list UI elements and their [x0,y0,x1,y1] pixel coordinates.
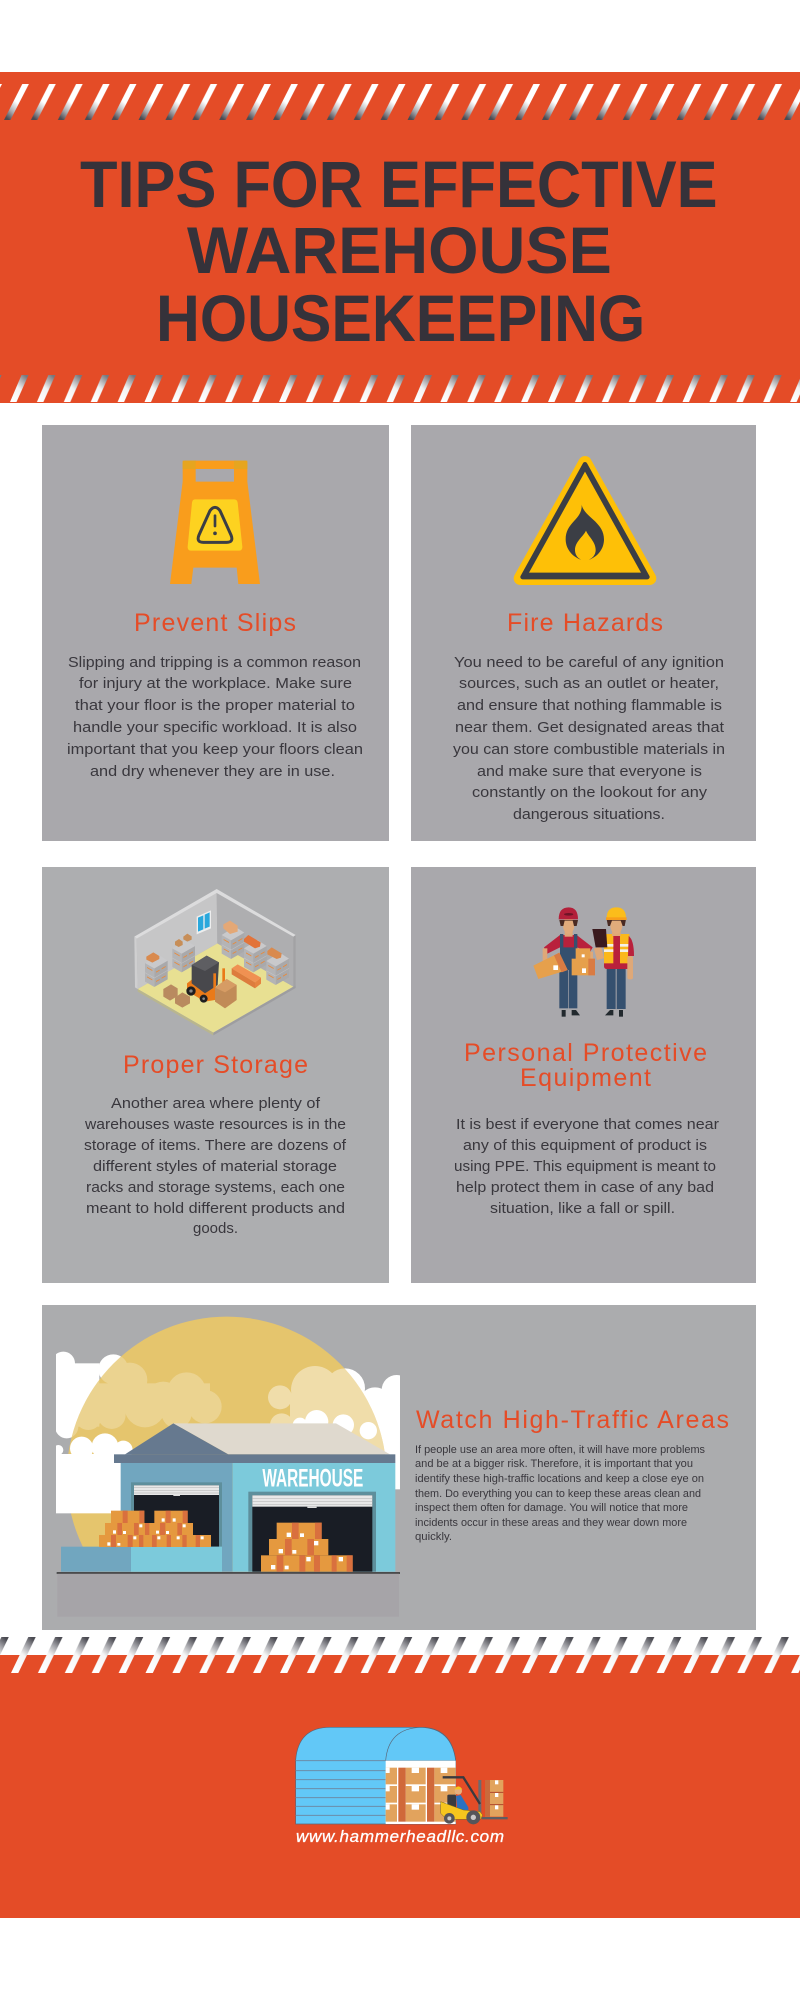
text: ppe body: using PPE. This equipment is meant to [454,1158,716,1175]
icon: wet floor sign [170,461,260,584]
text: prevent slips body: for injury at the workplace. Make sure [79,675,352,692]
right box pile [261,1523,353,1572]
text: high-traffic body: them. Do everything you can to keep these areas clean and [415,1488,701,1500]
text: fire hazards body: You need to be careful of any ignition [454,654,724,671]
title: TIPS FOR EFFECTIVE [80,147,718,221]
panel: fire hazards [411,425,756,841]
title: WAREHOUSE [187,213,612,287]
footer stripe band [0,1637,800,1673]
header banner [0,72,800,403]
hangar [296,1727,456,1824]
heading: watch high-traffic areas: Watch High-Traffic Areas [416,1406,729,1434]
text: ppe body: any of this equipment of product is [463,1137,707,1154]
text: fire hazards body: sources, such as an outlet or heater, [459,675,719,692]
panel: proper storage [42,867,389,1283]
heading: proper storage: Proper Storage [123,1051,308,1079]
text: fire hazards body: dangerous situations. [513,806,665,823]
text: prevent slips body: handle your specific workload. It is also [73,719,357,736]
footer banner [0,1637,800,1918]
logo: hangar and forklift [296,1727,508,1824]
text: high-traffic body: If people use an area more often, it will have more problems [415,1444,705,1456]
text: fire hazards body: you can store combustible materials in [453,741,725,758]
boxes held by left worker [533,948,595,979]
top stripe band [0,84,800,120]
icon: two warehouse workers [533,907,634,1017]
icon: isometric storage room [134,889,296,1035]
warehouse building [61,1423,395,1572]
text: prevent slips body: and dry whenever they are in use. [90,763,335,780]
panel: personal protective equipment [411,867,756,1283]
website url: www.hammerheadllc.com [296,1827,504,1846]
text: proper storage body: racks and storage systems, each one [86,1179,345,1196]
illustration: warehouse with sun and clouds [56,1316,400,1574]
text: ppe body: It is best if everyone that comes near [456,1116,719,1133]
text: prevent slips body: that your floor is the proper material to [75,697,355,714]
icon: fire warning triangle [520,463,650,578]
panel: watch high-traffic areas [42,1305,756,1637]
heading: personal protective equipment [464,1039,707,1092]
text: fire hazards body: and make sure that everyone is [477,763,702,780]
heading: personal protective equipment: Personal Protective [464,1039,707,1067]
text: fire hazards body [453,654,725,823]
text: ppe body: situation, like a fall or spill. [490,1200,675,1217]
text: proper storage body: storage of items. There are dozens of [84,1137,347,1154]
left box pile [99,1511,211,1547]
text: high-traffic body: identify these high-traffic locations and keep a close eye on [415,1473,704,1485]
text: fire hazards body: near them. Get designated areas that [455,719,725,736]
text: prevent slips body: important that you keep your floors clean [67,741,363,758]
ground [57,1572,400,1617]
title [80,147,718,356]
left worker [543,907,593,1017]
text: high-traffic body [415,1444,705,1543]
text: ppe body [454,1116,719,1217]
forklift [441,1777,508,1824]
text: high-traffic body: inspect them often for damage. You will notice that more [415,1502,688,1514]
text: proper storage body: Another area where plenty of [111,1095,321,1112]
text: proper storage body: goods. [193,1220,238,1237]
text: high-traffic body: incidents occur in these areas and they wear down more [415,1517,687,1529]
text: prevent slips body: Slipping and tripping is a common reason [68,654,361,671]
heading: prevent slips: Prevent Slips [134,609,296,637]
text: fire hazards body: constantly on the lookout for any [472,784,708,801]
heading: personal protective equipment: Equipment [520,1064,651,1092]
text: proper storage body [84,1095,347,1237]
bottom stripe band [0,375,800,402]
sign: warehouse: WAREHOUSE [262,1465,363,1493]
text: proper storage body: meant to hold different products and [86,1200,345,1217]
text: proper storage body: warehouses waste resources is in the [84,1116,346,1133]
text: prevent slips body [67,654,363,780]
heading: fire hazards: Fire Hazards [507,609,663,637]
text: high-traffic body: and be at a bigger risk. Therefore, it is important that you [415,1458,693,1470]
front clouds [53,1410,377,1513]
right worker [592,907,634,1017]
text: ppe body: help protect them in case of any bad [456,1179,714,1196]
text: high-traffic body: quickly. [415,1531,452,1543]
text: proper storage body: different styles of material storage [93,1158,337,1175]
title: HOUSEKEEPING [156,283,645,356]
text: fire hazards body: and ensure that nothing flammable is [457,697,722,714]
panel: prevent slips [42,425,389,841]
